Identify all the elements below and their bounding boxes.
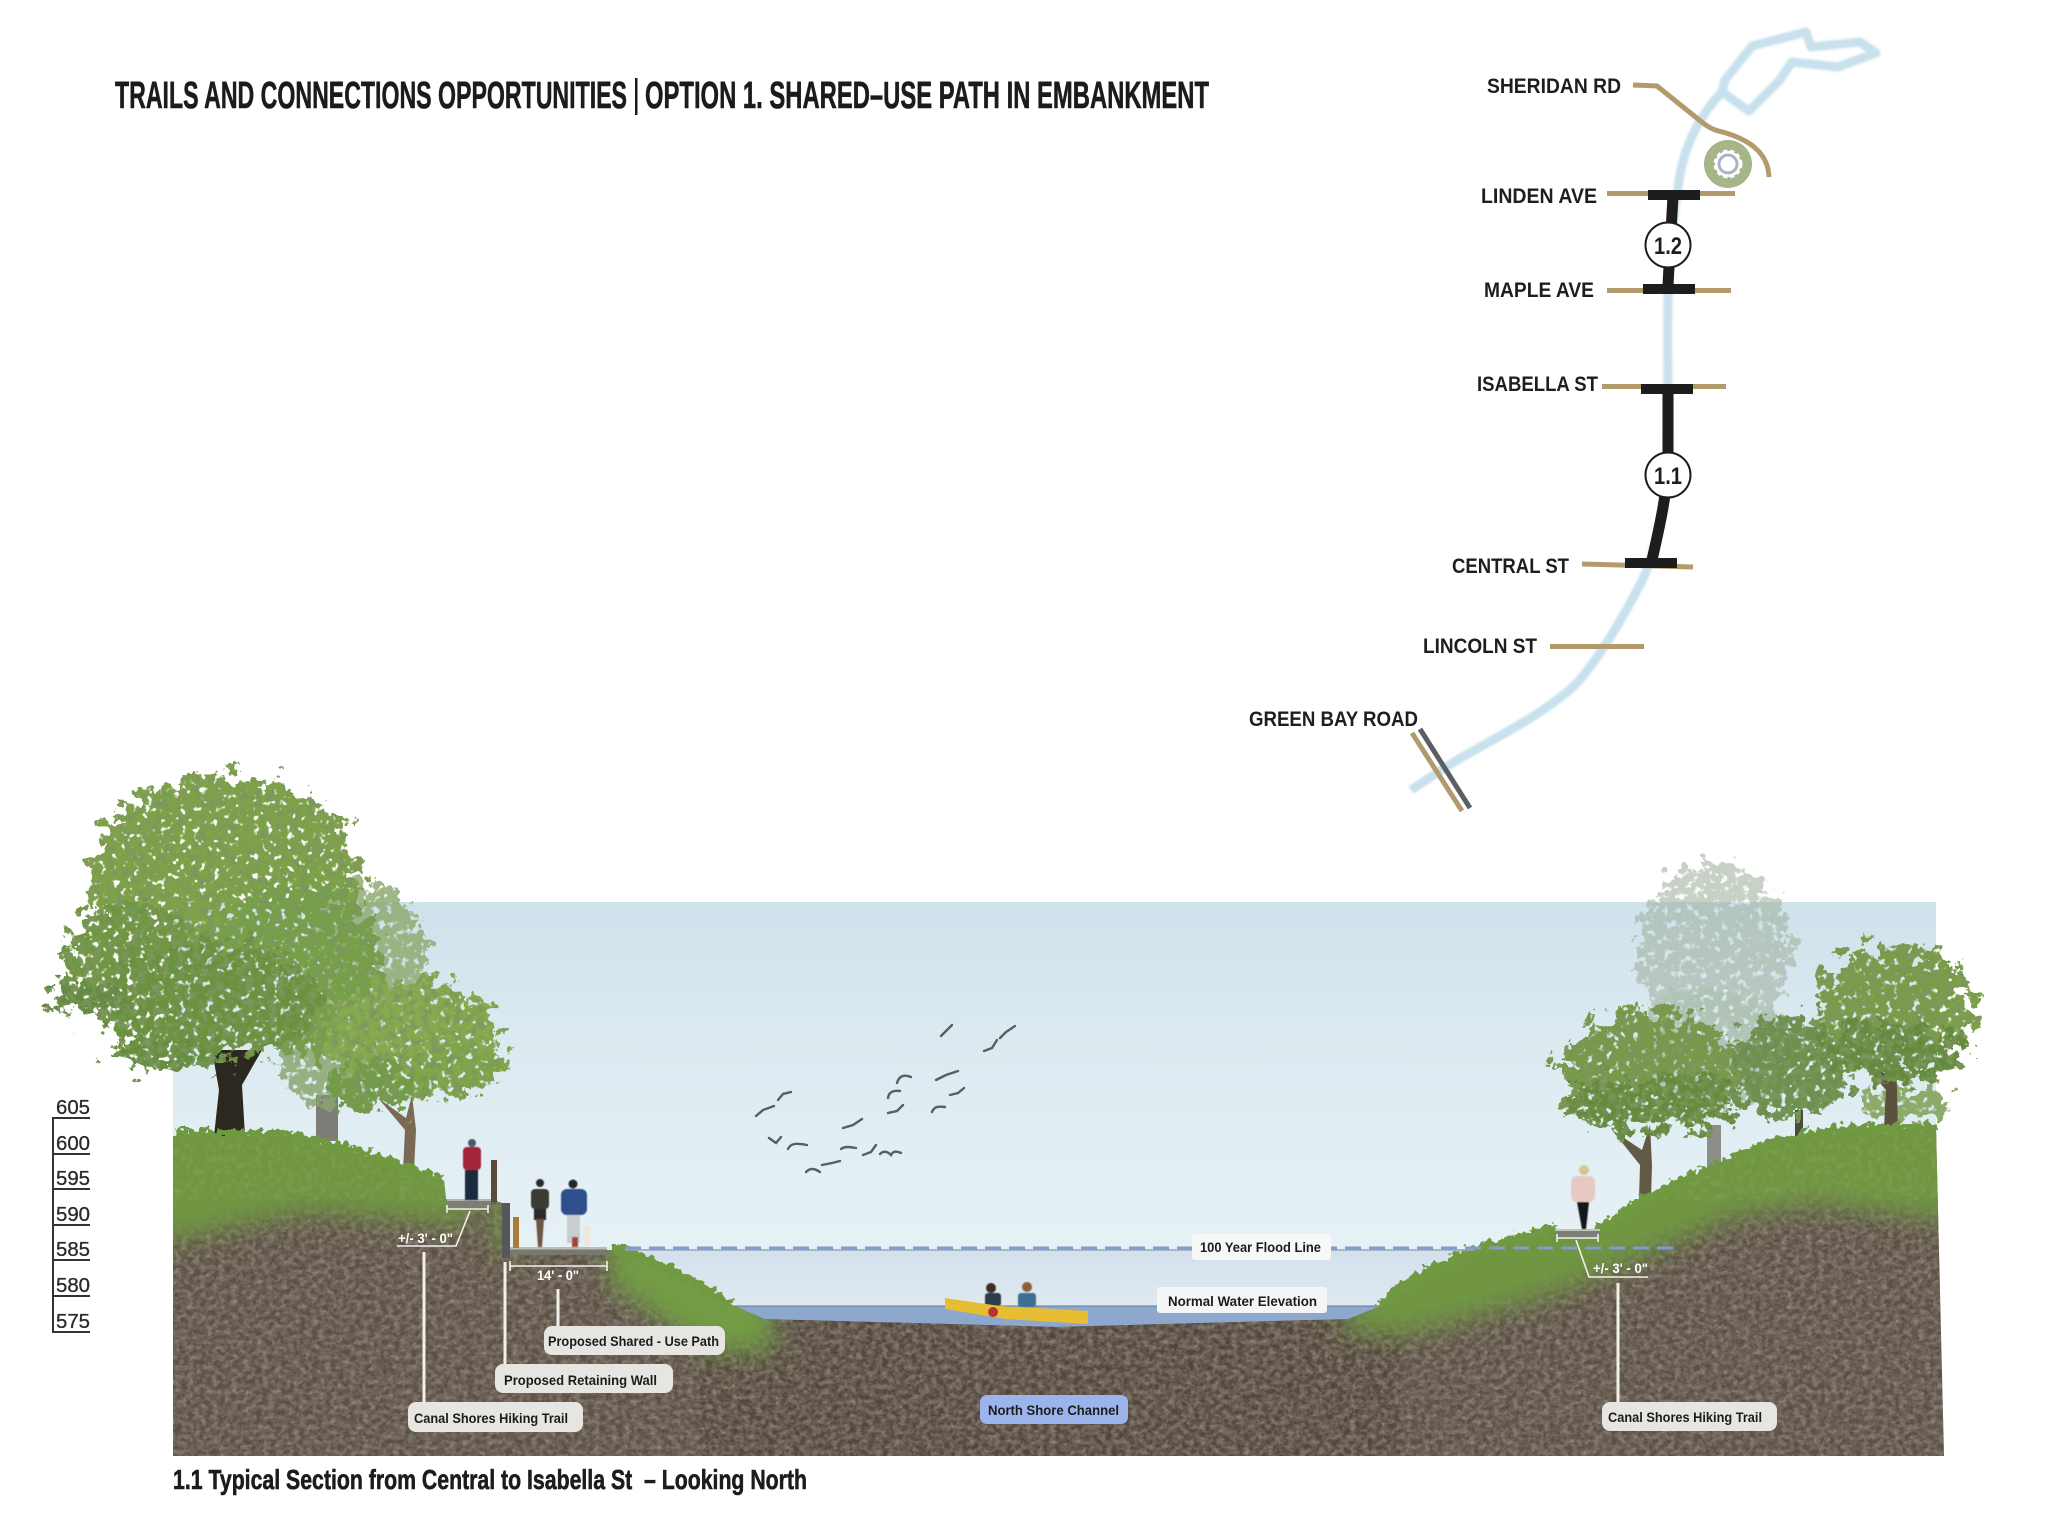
street labels: LINCOLN ST — [1423, 635, 1537, 658]
section: ground — [173, 1128, 1944, 1456]
section caption: 1.1 Typical Section from Central to Isabella St – Looking North — [173, 1464, 807, 1495]
elevation scale: 585 — [56, 1239, 90, 1261]
street labels: GREEN BAY ROAD — [1249, 708, 1418, 731]
retaining wall — [502, 1203, 510, 1258]
trunk — [212, 1050, 262, 1136]
person on right trail — [1571, 1165, 1595, 1229]
bollard — [513, 1217, 519, 1248]
elevation scale: 595 — [56, 1168, 90, 1190]
section: sky backdrop — [173, 902, 1936, 1322]
icon: green roundabout — [1704, 140, 1752, 188]
section: low shrub right — [1860, 1087, 1950, 1123]
callout: 100 Year Flood Line — [1192, 1234, 1331, 1260]
channel water — [728, 1306, 1382, 1328]
section: tree far right — [1814, 947, 1976, 1128]
runner — [531, 1179, 549, 1247]
right trail deck — [1555, 1229, 1600, 1238]
soil — [173, 1120, 1944, 1460]
street labels: SHERIDAN RD — [1487, 75, 1621, 98]
section: large tree left — [50, 775, 380, 1136]
dimension: right +/- 3'-0": +/- 3' - 0" — [1593, 1260, 1648, 1276]
key map — [1249, 32, 1876, 811]
callout: Canal Shores Hiking Trail (left): Canal Shores Hiking Trail — [414, 1410, 568, 1426]
marker 1.2: 1.2 — [1654, 233, 1682, 260]
callout: Proposed Shared - Use Path: Proposed Shared - Use Path — [548, 1333, 719, 1349]
dimension: 14'-0" — [510, 1261, 607, 1283]
dog — [583, 1225, 591, 1247]
road: Lincoln St — [1550, 644, 1644, 649]
dimension: 14'-0": 14' - 0" — [537, 1267, 579, 1283]
street labels: CENTRAL ST — [1452, 555, 1569, 578]
proposed shared-use path — [510, 1247, 607, 1255]
left trail deck — [447, 1199, 491, 1208]
road: Sheridan Rd — [1633, 85, 1769, 177]
section: background hazy tree left — [280, 880, 427, 1141]
grass banks — [173, 1128, 1938, 1368]
street labels: MAPLE AVE — [1484, 279, 1594, 302]
flood zone water tint — [620, 1249, 1480, 1309]
flood line — [625, 1248, 1680, 1250]
callout: Canal Shores Hiking Trail (right) — [1602, 1402, 1777, 1431]
section: tree right — [1562, 1010, 1738, 1199]
road: Green Bay Road — [1412, 729, 1470, 811]
callout: Proposed Shared - Use Path — [544, 1326, 725, 1355]
callout: 100 Year Flood Line: 100 Year Flood Line — [1200, 1239, 1321, 1255]
segment 1.2 path — [1643, 190, 1700, 294]
elevation scale: 580 — [56, 1275, 90, 1297]
callout: Canal Shores Hiking Trail (left) — [408, 1402, 583, 1432]
trail post — [491, 1160, 497, 1202]
dimension: left +/- 3'-0": +/- 3' - 0" — [398, 1230, 453, 1246]
walker in blue — [561, 1180, 587, 1247]
street labels: LINDEN AVE — [1481, 185, 1597, 208]
road: Linden Ave — [1607, 191, 1735, 196]
elevation scale: 575 — [56, 1311, 90, 1333]
elevation scale — [52, 1097, 90, 1333]
section: background hazy tree right — [1628, 864, 1792, 1173]
person in red — [463, 1139, 481, 1200]
leader lines — [424, 1252, 1618, 1403]
flock of birds — [756, 1025, 1015, 1172]
dimension: left +/- 3'-0" — [397, 1205, 488, 1246]
dimension: right +/- 3'-0" — [1557, 1234, 1648, 1277]
elevation scale: 600 — [56, 1133, 90, 1155]
callout: Normal Water Elevation — [1157, 1287, 1327, 1313]
section: small tree left — [322, 980, 505, 1171]
street labels: ISABELLA ST — [1477, 373, 1598, 396]
elevation scale: 605 — [56, 1097, 90, 1119]
grass fringe along bank tops — [176, 1127, 1936, 1307]
callout: North Shore Channel — [980, 1395, 1128, 1424]
road: Isabella St — [1602, 384, 1726, 389]
callout: Normal Water Elevation: Normal Water Elevation — [1168, 1293, 1317, 1309]
section: middle tree right — [1728, 1018, 1852, 1142]
marker 1.1: 1.1 — [1654, 463, 1682, 490]
elevation scale: 590 — [56, 1204, 90, 1226]
road: Maple Ave — [1607, 288, 1731, 293]
callout: Canal Shores Hiking Trail (right): Canal Shores Hiking Trail — [1608, 1409, 1762, 1425]
marker 1.1 — [1646, 452, 1690, 498]
title: TRAILS AND CONNECTIONS OPPORTUNITIES — [115, 75, 627, 117]
river: North Shore Channel — [1411, 32, 1876, 790]
kayak with two paddlers — [945, 1282, 1088, 1324]
road: Central St — [1582, 564, 1693, 567]
segment 1.1 path — [1625, 384, 1693, 568]
marker 1.2 — [1646, 222, 1690, 268]
callout: Proposed Retaining Wall: Proposed Retaining Wall — [504, 1372, 657, 1388]
callout: Proposed Retaining Wall — [495, 1364, 673, 1393]
street labels — [1249, 75, 1621, 731]
callout: North Shore Channel: North Shore Channel — [988, 1402, 1119, 1418]
title: OPTION 1. SHARED–USE PATH IN EMBANKMENT — [645, 75, 1209, 117]
